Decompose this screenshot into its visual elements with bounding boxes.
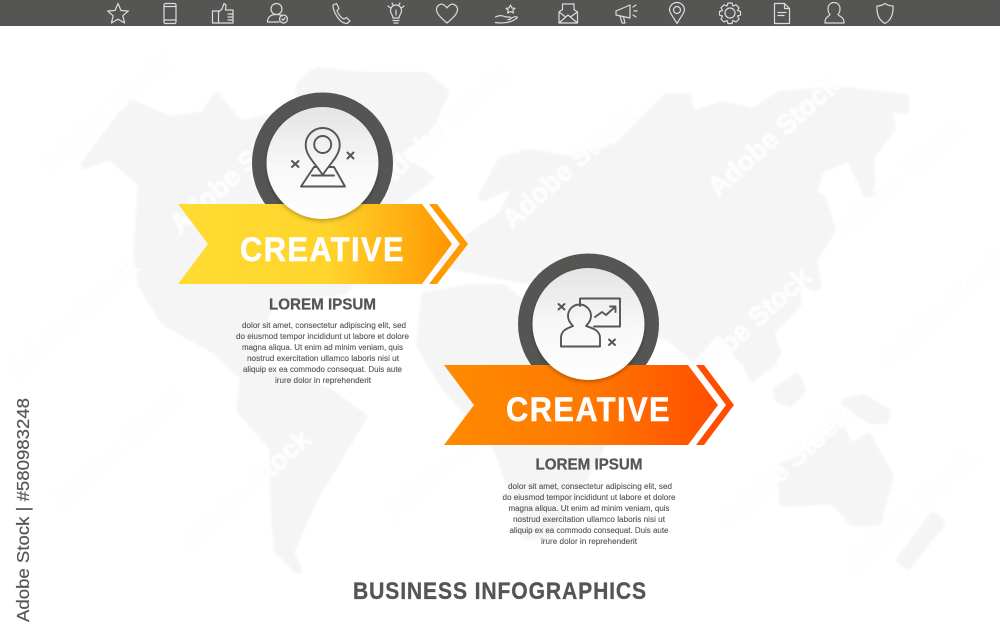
Adobe Stock watermarks: Adobe Stock bbox=[369, 61, 512, 194]
Adobe Stock watermarks: Adobe Stock bbox=[839, 443, 982, 576]
banner label: CREATIVE bbox=[240, 231, 405, 269]
Adobe Stock watermarks: Adobe Stock bbox=[674, 261, 817, 394]
description text: aliquip ex ea commodo consequat. Duis aute bbox=[243, 364, 402, 374]
description text: dolor sit amet, consectetur adipiscing elit, sed bbox=[242, 320, 406, 330]
world map background bbox=[85, 71, 941, 570]
Adobe Stock watermarks: Adobe Stock bbox=[164, 106, 307, 239]
side stock label: Adobe Stock | #580983248 bbox=[13, 398, 33, 622]
description text: do eiusmod tempor incididunt ut labore et dolore bbox=[502, 492, 676, 502]
map: South America bbox=[240, 372, 363, 570]
description text: do eiusmod tempor incididunt ut labore et dolore bbox=[236, 331, 409, 341]
icon: hand with star bbox=[496, 5, 518, 23]
map: Eurasia bbox=[440, 90, 905, 367]
icon: smartphone bbox=[164, 4, 176, 24]
map: New Zealand bbox=[900, 516, 941, 566]
Adobe Stock watermarks: Adobe Stock bbox=[34, 46, 177, 179]
map: Australia bbox=[782, 427, 890, 522]
icon: megaphone bbox=[616, 5, 637, 23]
icon: shield bbox=[877, 4, 893, 24]
step 2 bbox=[444, 261, 734, 546]
icon: user with check bbox=[268, 4, 288, 23]
description text: irure dolor in reprehenderit bbox=[275, 375, 372, 385]
title: BUSINESS INFOGRAPHICS bbox=[353, 578, 647, 605]
description text bbox=[236, 320, 409, 385]
map: Borneo bbox=[777, 377, 802, 403]
heading: LOREM IPSUM bbox=[536, 456, 642, 474]
map: New Guinea bbox=[845, 398, 887, 420]
icon: open envelope bbox=[559, 4, 578, 23]
icon: person bbox=[825, 3, 844, 23]
step 1 bbox=[178, 100, 468, 385]
icon: location pin bbox=[670, 3, 684, 24]
icon: light bulb bbox=[388, 3, 404, 23]
icon: document bbox=[774, 4, 790, 24]
heading: LOREM IPSUM bbox=[269, 296, 376, 314]
description text bbox=[502, 481, 676, 546]
icon: thumbs up bbox=[212, 4, 233, 23]
description text: nostrud exercitation ullamco laboris nisi ut bbox=[247, 353, 400, 363]
white circle with presenter icon bbox=[532, 268, 644, 380]
Adobe Stock watermarks: Adobe Stock bbox=[379, 393, 522, 526]
Adobe Stock watermarks: Adobe Stock bbox=[829, 111, 972, 244]
ring 1 bbox=[260, 100, 386, 226]
Adobe Stock watermarks: Adobe Stock bbox=[2, 251, 145, 384]
icon: heart bbox=[436, 4, 458, 23]
white circle with map pin icon bbox=[266, 107, 378, 219]
Adobe Stock watermarks: Adobe Stock bbox=[174, 423, 317, 556]
top icon bar bbox=[0, 0, 1000, 26]
orange arrow banner bbox=[444, 365, 734, 445]
ring 2 bbox=[526, 261, 652, 387]
icon: gear bbox=[720, 3, 740, 24]
map: North America bbox=[85, 71, 445, 378]
Adobe Stock watermarks: Adobe Stock bbox=[702, 69, 845, 202]
yellow arrow banner bbox=[178, 204, 468, 284]
description text: nostrud exercitation ullamco laboris nisi ut bbox=[513, 514, 666, 524]
description text: magna aliqua. Ut enim ad minim veniam, quis bbox=[242, 342, 403, 352]
description text: aliquip ex ea commodo consequat. Duis aute bbox=[510, 525, 669, 535]
banner label: CREATIVE bbox=[506, 391, 671, 429]
icon: phone bbox=[333, 4, 350, 24]
map: Indonesia bbox=[746, 362, 773, 378]
description text: irure dolor in reprehenderit bbox=[541, 536, 638, 546]
Adobe Stock watermarks: Adobe Stock bbox=[712, 401, 855, 534]
map: Africa bbox=[420, 288, 605, 536]
icon: star bbox=[108, 4, 128, 23]
description text: dolor sit amet, consectetur adipiscing elit, sed bbox=[508, 481, 672, 491]
Adobe Stock watermarks: Adobe Stock bbox=[496, 101, 639, 234]
description text: magna aliqua. Ut enim ad minim veniam, quis bbox=[508, 503, 670, 513]
Adobe Stock watermarks: Adobe Stock bbox=[46, 381, 189, 514]
